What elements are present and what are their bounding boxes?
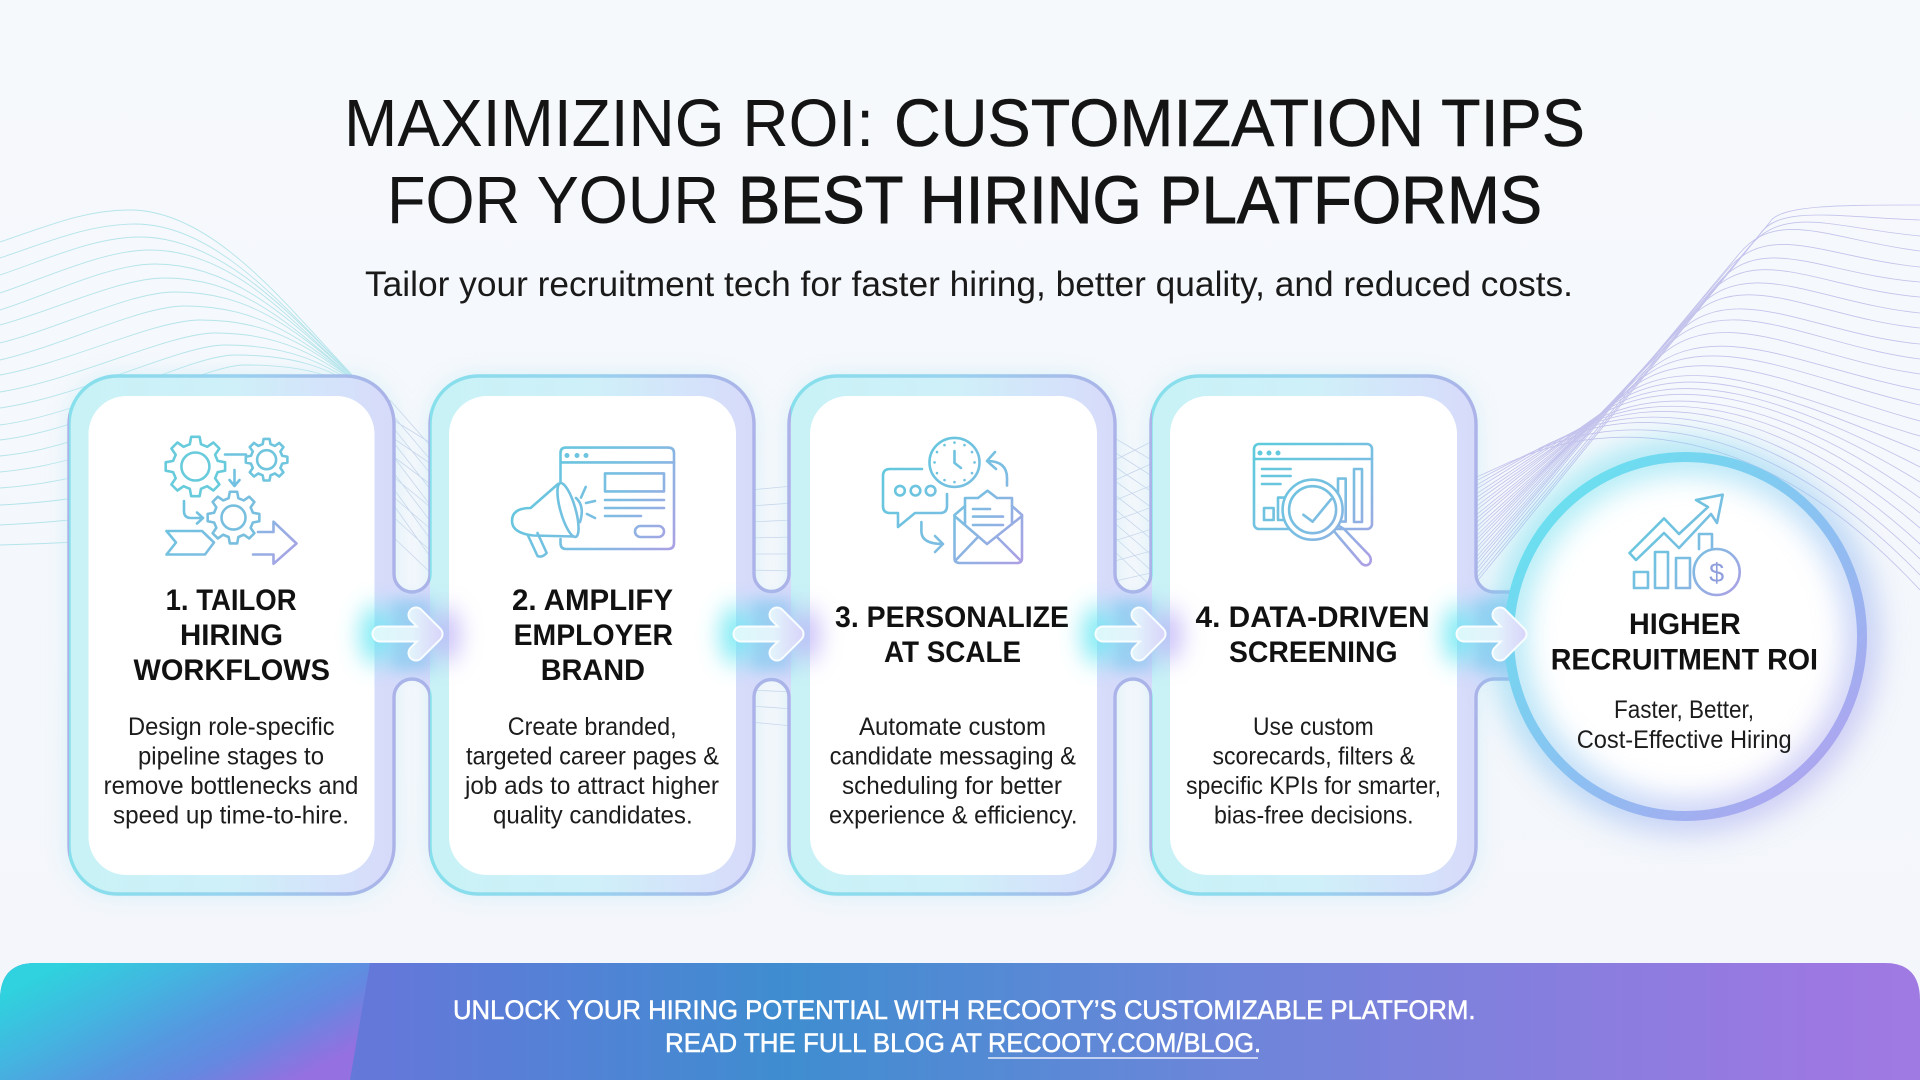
result heading: RECRUITMENT ROI [1551, 643, 1818, 676]
hatch lines visible between cards [390, 400, 1155, 726]
heading 2 [512, 584, 673, 687]
heading 1 [134, 584, 330, 687]
body 4: bias-free decisions. [1214, 802, 1414, 830]
arrow 4 [1464, 615, 1519, 653]
title: BEST HIRING PLATFORMS [738, 163, 1542, 238]
footer text [453, 995, 1476, 1058]
result text: Faster, Better, [1614, 696, 1754, 724]
circle ring [1509, 457, 1862, 816]
body 1: Design role-specific [128, 713, 335, 741]
result text: Cost-Effective Hiring [1577, 726, 1792, 754]
footer text: UNLOCK YOUR HIRING POTENTIAL WITH RECOOTY’S CUSTOMIZABLE PLATFORM. [453, 995, 1476, 1025]
card 1 [88, 396, 374, 875]
body 3: Automate custom [859, 713, 1046, 741]
title: FOR YOUR [387, 163, 719, 238]
connector glow 1 [361, 599, 459, 671]
icon: clock, chat and envelope [883, 438, 1022, 563]
arrow 1 [380, 615, 435, 653]
heading 4 [1196, 601, 1430, 669]
arrow 2 [741, 615, 796, 653]
result heading [1551, 608, 1818, 676]
result circle [1508, 456, 1862, 816]
heading 4: SCREENING [1229, 636, 1398, 669]
icon: dashboard with magnifier [1254, 444, 1372, 565]
body 1: speed up time-to-hire. [113, 802, 349, 830]
heading 1: WORKFLOWS [134, 654, 330, 687]
footer banner [0, 963, 1920, 1080]
footer left accent [0, 963, 370, 1080]
heading 1: HIRING [180, 619, 283, 652]
title [344, 86, 1585, 238]
title: MAXIMIZING ROI: [344, 86, 874, 161]
connector glow 4 [1444, 599, 1542, 671]
result text [1577, 696, 1792, 754]
circle glow [1508, 456, 1862, 816]
body 4 [1186, 713, 1441, 830]
card 2 [449, 396, 736, 875]
card 4 [1170, 396, 1457, 875]
body 4: specific KPIs for smarter, [1186, 772, 1441, 800]
body 3: experience & efficiency. [829, 802, 1078, 830]
body 3: scheduling for better [842, 772, 1062, 800]
heading 3: AT SCALE [884, 636, 1021, 669]
card 3 [810, 396, 1097, 875]
heading 2: EMPLOYER [514, 619, 673, 652]
body 2: quality candidates. [493, 802, 693, 830]
icon: growth chart with coin [1630, 495, 1740, 595]
body 2: job ads to attract higher [464, 772, 719, 800]
connector glow 3 [1083, 599, 1181, 671]
subtitle: Tailor your recruitment tech for faster hiring, better quality, and reduced costs. [365, 265, 1573, 304]
right wave lines [1470, 205, 1920, 590]
footer text: RECOOTY.COM/BLOG. [988, 1028, 1261, 1058]
coin dollar sign: $ [1709, 558, 1724, 588]
result heading: HIGHER [1629, 608, 1741, 641]
body 4: Use custom [1253, 713, 1374, 741]
body 3: candidate messaging & [830, 742, 1076, 770]
heading 3 [835, 601, 1069, 669]
connected card frame [69, 376, 1520, 894]
frame glow [69, 376, 1476, 894]
heading 2: 2. AMPLIFY [512, 584, 673, 617]
footer text: READ THE FULL BLOG AT [665, 1028, 982, 1058]
heading 1: 1. TAILOR [166, 584, 297, 617]
body 1: remove bottlenecks and [104, 772, 358, 800]
body 1: pipeline stages to [138, 742, 324, 770]
icon: gears workflow [166, 437, 296, 564]
arrow 3 [1103, 615, 1158, 653]
body 4: scorecards, filters & [1212, 742, 1415, 770]
body 1 [104, 713, 358, 830]
heading 2: BRAND [541, 654, 645, 687]
body 3 [829, 713, 1078, 830]
left wave lines [0, 210, 379, 545]
title: CUSTOMIZATION TIPS [894, 86, 1585, 161]
icon: megaphone and career page [512, 448, 674, 557]
heading 4: 4. DATA-DRIVEN [1196, 601, 1430, 634]
body 2 [464, 713, 719, 830]
body 2: targeted career pages & [466, 742, 719, 770]
body 2: Create branded, [508, 713, 677, 741]
heading 3: 3. PERSONALIZE [835, 601, 1069, 634]
connector glow 2 [721, 599, 819, 671]
